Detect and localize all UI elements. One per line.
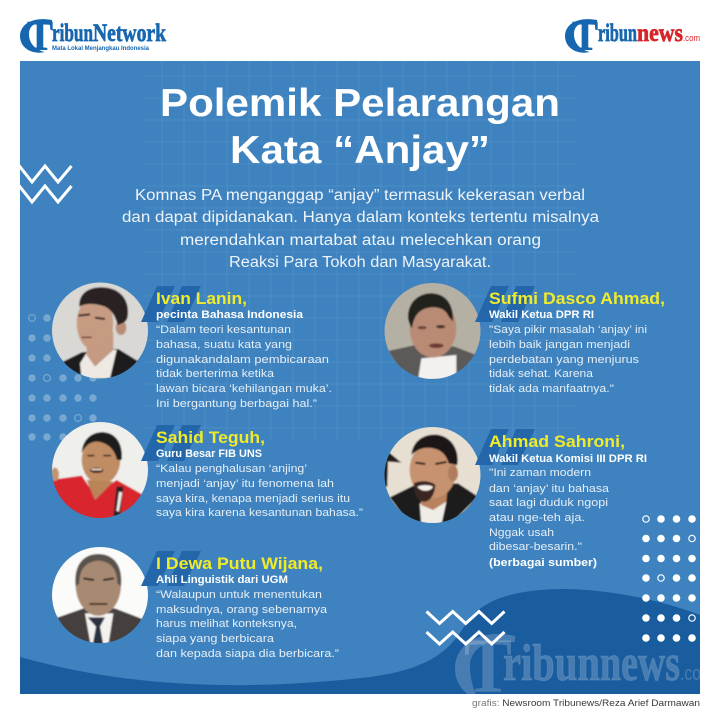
quote: "Saya pikir masalah ‘anjay’ ini	[489, 324, 647, 336]
quote	[489, 324, 647, 395]
watermark: Tribunnews: news	[600, 635, 680, 692]
dark wave	[20, 589, 700, 694]
quote mark	[475, 429, 535, 465]
icon: zigzag right	[426, 612, 504, 644]
logo: Tribunnews.com: .com	[683, 33, 700, 44]
quote: maksudnya, orang sebenarnya	[156, 604, 328, 616]
photo: Ahmad Sahroni	[384, 427, 480, 523]
quote: saat lagi duduk ngopi	[489, 497, 608, 509]
logo: Tribun Network: Network	[93, 20, 166, 47]
photo: Sahid Teguh	[52, 422, 148, 518]
quote	[489, 467, 610, 553]
logo: Tribun Network: ribun	[52, 20, 93, 47]
quote: dan ‘anjay’ itu bahasa	[489, 483, 610, 495]
name: Sahid Teguh,	[156, 429, 265, 447]
role: Guru Besar FIB UNS	[156, 448, 262, 460]
quote mark	[475, 286, 535, 322]
watermark: Tribunnews	[455, 634, 700, 694]
quote: dibesar-besarin."	[489, 541, 582, 553]
watermark: Tribunnews: ribun	[503, 635, 600, 692]
decorative dots right	[642, 515, 696, 642]
logo: Tribunnews.com	[565, 14, 700, 60]
logo: Tribunnews.com: ribun	[598, 20, 637, 47]
quote: lebih baik jangan menjadi	[489, 339, 630, 351]
quote: lawan bicara ‘kehilangan muka’.	[156, 383, 332, 395]
name: Ahmad Sahroni,	[489, 433, 625, 451]
quote: siapa yang berbicara	[156, 633, 275, 645]
name: Ivan Lanin,	[156, 290, 247, 308]
quote	[156, 589, 339, 660]
icon: zigzag left	[6, 166, 72, 202]
quote mark	[141, 425, 201, 461]
quote: “Walaupun untuk menentukan	[156, 589, 322, 601]
quote: “Dalam teori kesantunan	[156, 324, 291, 336]
quote: tidak sehat. Karena	[489, 368, 594, 380]
role: Wakil Ketua DPR RI	[489, 309, 594, 321]
logo: Tribun Network: Mata Lokal Menjangkau Indonesia	[52, 45, 149, 52]
intro text: Komnas PA menganggap “anjay” termasuk kekerasan verbal	[135, 187, 585, 204]
card: Sufmi Dasco Ahmad	[378, 275, 665, 395]
quote: menjadi ‘anjay’ itu fenomena lah	[156, 478, 334, 490]
quote: “Kalau penghalusan ‘anjing’	[156, 463, 307, 475]
logo: Tribunnews.com: news	[637, 20, 683, 47]
intro text: dan dapat dipidanakan. Hanya dalam konteks tertentu misalnya	[122, 209, 599, 226]
quote: harus melihat konteksnya,	[156, 618, 297, 630]
quote: atau nge-teh aja.	[489, 512, 585, 524]
quote: tidak berterima ketika	[156, 368, 275, 380]
quote: bahasa, suatu kata yang	[156, 339, 292, 351]
role: Ahli Linguistik dari UGM	[156, 574, 288, 586]
intro text	[122, 187, 599, 271]
card: Sahid Teguh	[52, 422, 362, 518]
source note: (berbagai sumber)	[489, 557, 597, 569]
intro text: Reaksi Para Tokoh dan Masyarakat.	[229, 254, 491, 271]
card: Ahmad Sahroni	[378, 420, 647, 569]
quote mark	[141, 551, 201, 586]
quote: saya kira, kenapa menjadi serius itu	[156, 493, 350, 505]
photo: I Dewa Putu Wijana	[52, 547, 148, 643]
decorative dots left	[28, 314, 97, 441]
quote	[156, 463, 363, 519]
photo: Sufmi Dasco Ahmad	[384, 283, 480, 379]
role: Wakil Ketua Komisi III DPR RI	[489, 453, 647, 465]
intro text: merendahkan martabat atau melecehkan orang	[180, 232, 541, 249]
quote: perdebatan yang menjurus	[489, 354, 640, 366]
title: Polemik Pelarangan	[160, 82, 560, 125]
credit line: grafis: Newsroom Tribunews/Reza Arief Darmawan	[472, 698, 700, 709]
photo: Ivan Lanin	[52, 282, 148, 378]
quote: tidak ada manfaatnya."	[489, 383, 614, 395]
title: Kata “Anjay”	[230, 129, 490, 172]
name: Sufmi Dasco Ahmad,	[489, 290, 665, 308]
quote: Nggak usah	[489, 527, 554, 539]
role: pecinta Bahasa Indonesia	[156, 309, 304, 321]
quote mark	[141, 286, 201, 322]
quote: digunakandalam pembicaraan	[156, 354, 329, 366]
card: Ivan Lanin	[45, 275, 332, 410]
quote: "Ini zaman modern	[489, 467, 591, 479]
quote: dan kepada siapa dia berbicara.”	[156, 648, 339, 660]
name: I Dewa Putu Wijana,	[156, 555, 323, 573]
quote	[156, 324, 332, 410]
card: I Dewa Putu Wijana	[48, 543, 339, 660]
quote: saya kira karena kesantunan bahasa.”	[156, 507, 363, 519]
title	[160, 82, 560, 172]
logo: Tribun Network	[20, 14, 166, 60]
watermark: Tribunnews: T	[464, 622, 512, 709]
logo: Tribunnews.com: T	[572, 14, 598, 60]
logo: Tribun Network: T	[27, 14, 53, 60]
quote: Ini bergantung berbagai hal.”	[156, 398, 317, 410]
